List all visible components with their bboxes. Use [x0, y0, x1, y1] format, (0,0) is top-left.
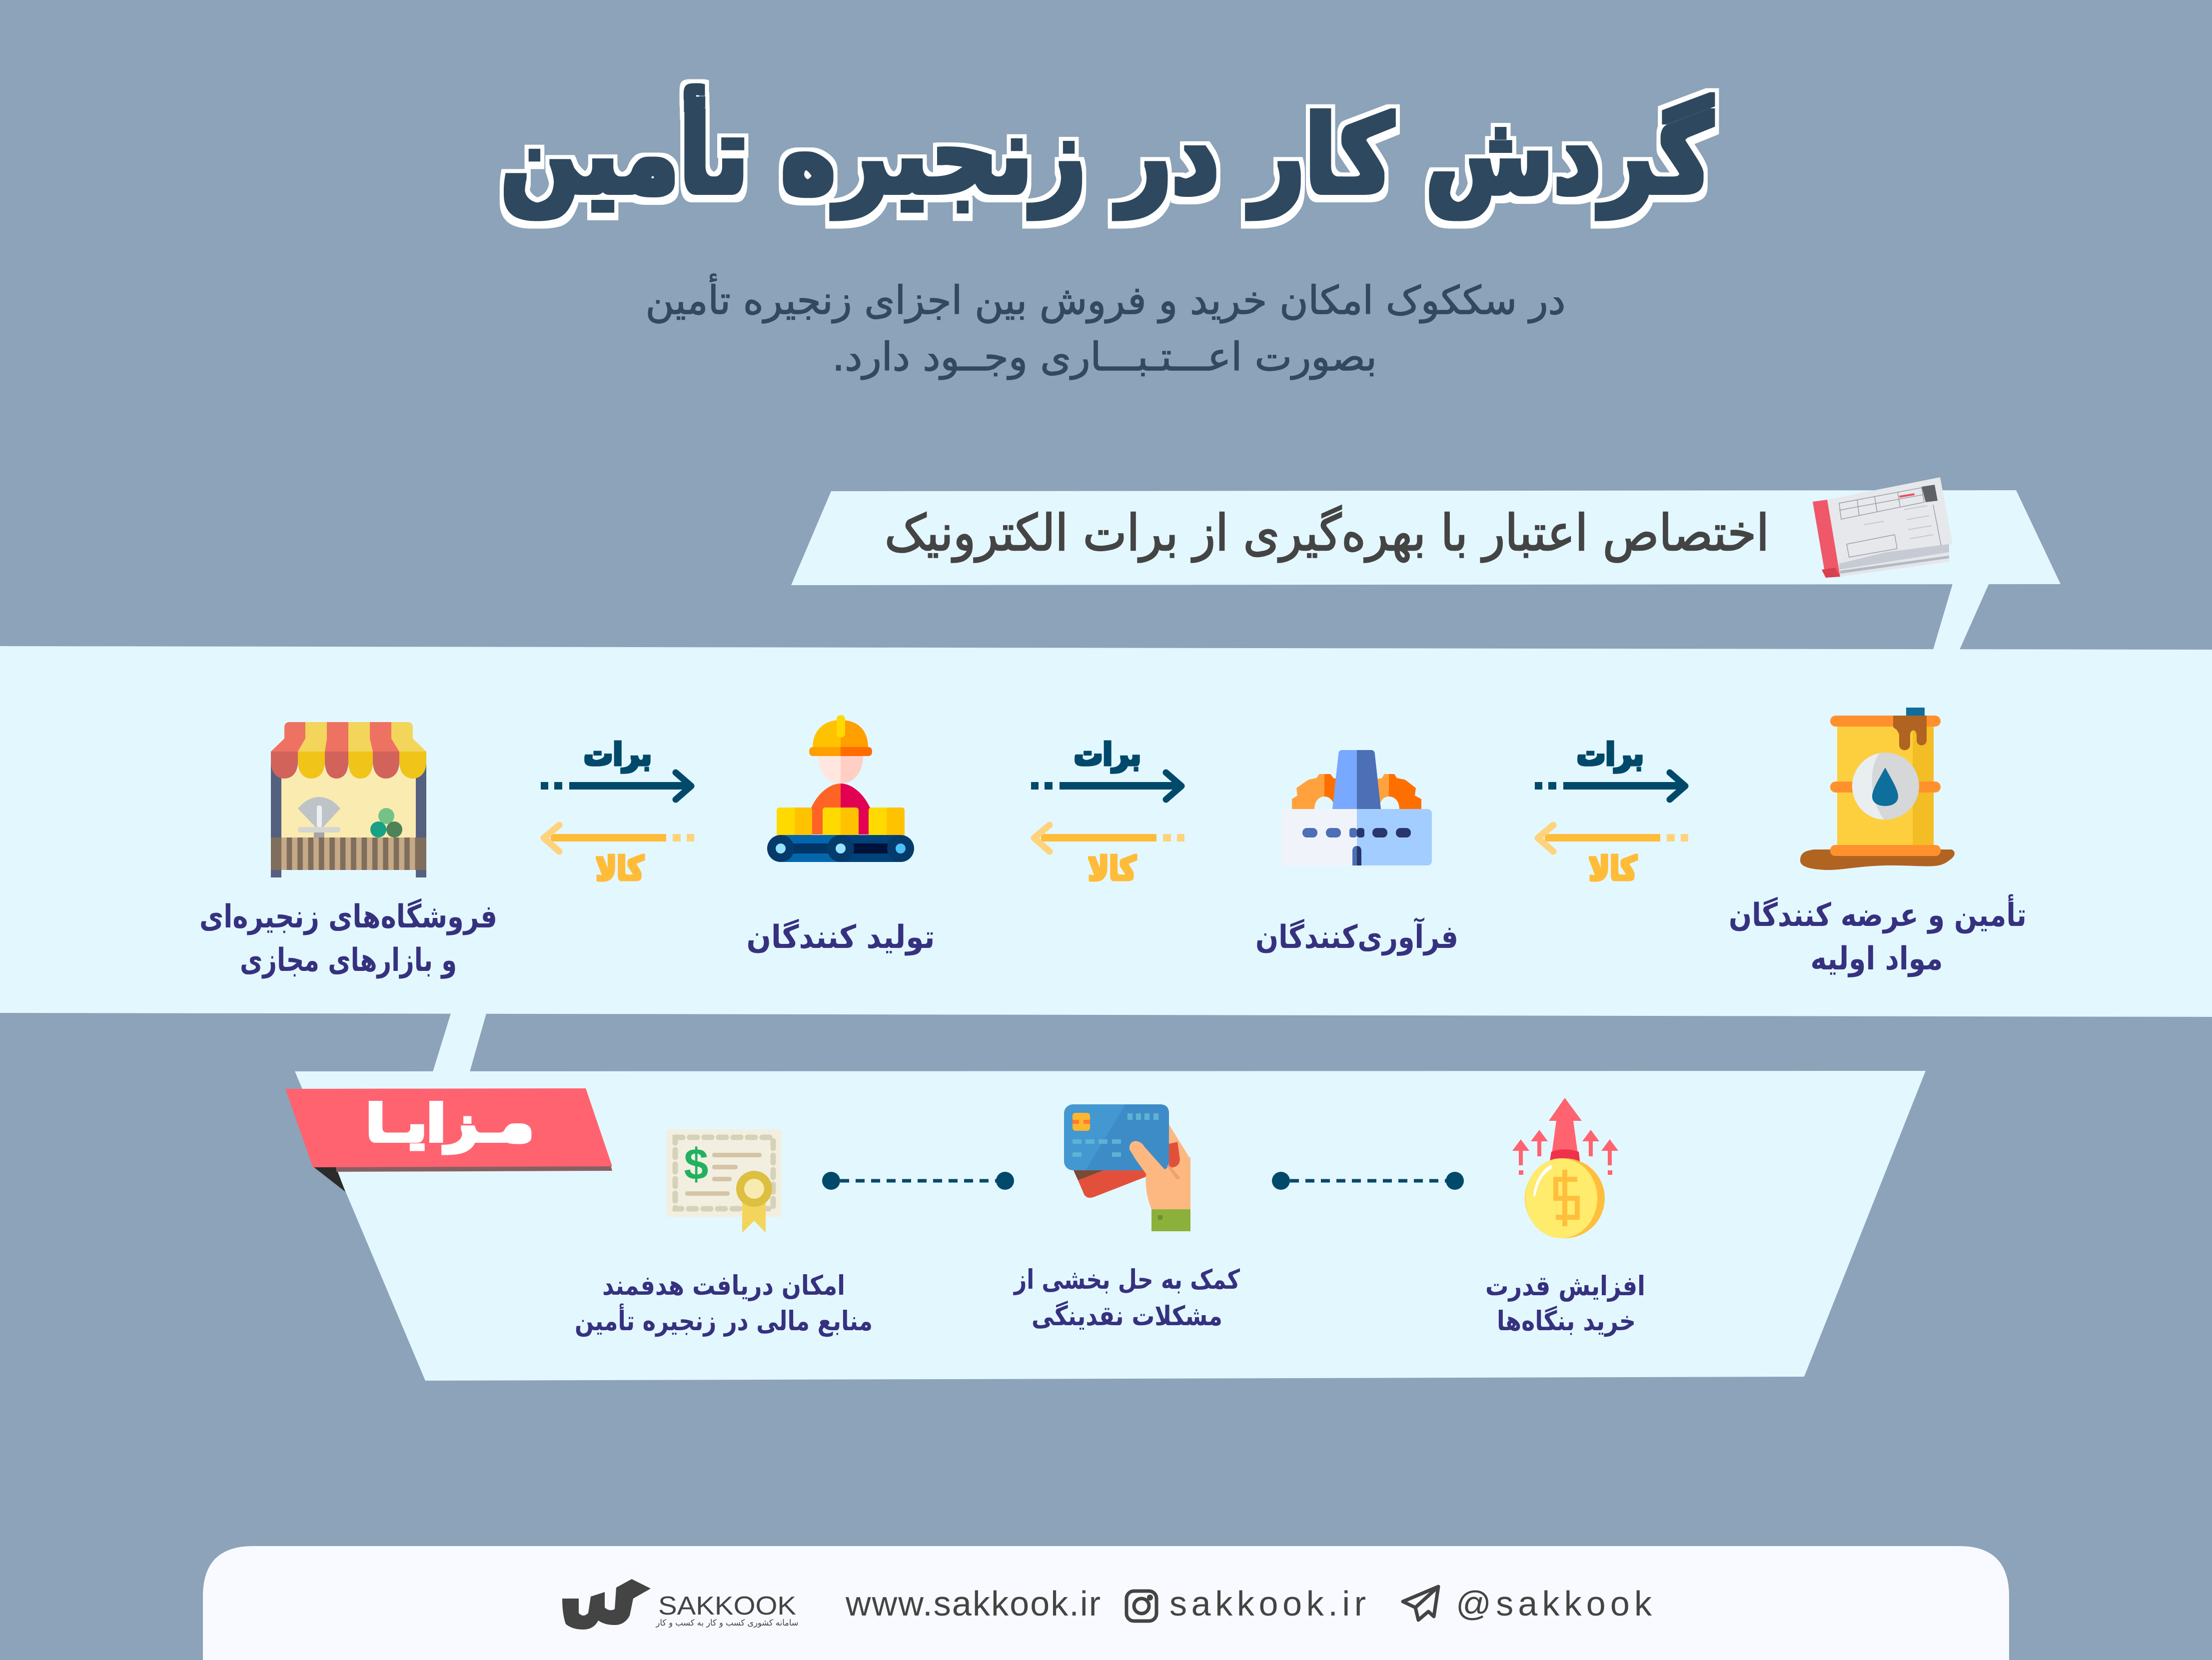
label: liquidity help: کمک به حل بخشی از	[1013, 1264, 1240, 1295]
arrow pair: processors and producers	[1031, 736, 1184, 888]
benefits ribbon	[285, 1088, 612, 1192]
label: liquidity help	[1013, 1264, 1240, 1332]
icon: certificate: $	[684, 1139, 708, 1189]
banner heading: اختصاص اعتبار با بهره‌گیری از برات الکترونیک	[885, 504, 1769, 563]
panel: electronic bill banner	[791, 490, 2061, 650]
label: raw material suppliers: مواد اولیه	[1810, 940, 1943, 977]
icon: factory	[1282, 750, 1432, 865]
subtitle text	[646, 274, 1565, 380]
arrow pair: producers and retailers: برات	[584, 736, 652, 773]
label: processors: فرآوری‌کنندگان	[1255, 917, 1458, 956]
arrow pair: processors and producers: برات	[1074, 736, 1141, 773]
website: www.sakkook.ir	[845, 1584, 1101, 1623]
arrow pair: raw materials and processors	[1535, 736, 1688, 888]
icon: instagram	[1126, 1591, 1156, 1621]
label: purchasing power: خرید بنگاه‌ها	[1497, 1305, 1636, 1337]
dotted connector	[822, 1172, 1014, 1190]
arrow pair: processors and producers: کالا	[1088, 849, 1136, 888]
icon: credit cards in hand	[1064, 1104, 1190, 1231]
title: گردش کار در زنجیره تأمین	[501, 85, 1713, 219]
subtitle text: بصورت اعـــتـبـــاری وجــود دارد.	[832, 335, 1377, 380]
arrow pair: producers and retailers: کالا	[596, 849, 644, 888]
icon: oil barrel	[1800, 708, 1955, 870]
icon: telegram	[1403, 1587, 1438, 1620]
label: target funding: منابع مالی در زنجیره تأمین	[575, 1303, 873, 1337]
arrow pair: producers and retailers	[541, 736, 694, 888]
label: producers: تولید کنندگان	[747, 918, 935, 956]
label: purchasing power: افزایش قدرت	[1485, 1270, 1645, 1302]
ribbon heading: مـزایـا	[366, 1094, 534, 1153]
logo: SAKKOOK	[658, 1592, 796, 1621]
panel: benefits	[295, 1012, 1926, 1381]
arrow pair: raw materials and processors: برات	[1577, 736, 1644, 773]
logo	[562, 1579, 799, 1630]
subtitle text: در سککوک امکان خرید و فروش بین اجزای زنجیره تأمین	[646, 274, 1565, 324]
label: raw material suppliers: تأمین و عرضه کنندگان	[1729, 894, 2027, 934]
label: retailers: و بازارهای مجازی	[240, 942, 457, 979]
label: retailers: فروشگاه‌های زنجیره‌ای	[199, 898, 497, 935]
icon: worker on conveyor	[767, 715, 914, 862]
label: raw material suppliers	[1729, 894, 2027, 977]
label: target funding	[575, 1270, 873, 1337]
telegram handle: @sakkook	[1456, 1584, 1652, 1623]
dotted connector	[1272, 1172, 1464, 1190]
icon: bill booklet	[1813, 477, 1953, 578]
label: retailers	[199, 898, 497, 979]
label: target funding: امکان دریافت هدفمند	[602, 1270, 845, 1301]
icon: market stall	[271, 722, 426, 877]
icon: certificate	[666, 1129, 782, 1233]
label: purchasing power	[1485, 1270, 1645, 1337]
label: liquidity help: مشکلات نقدینگی	[1032, 1300, 1222, 1332]
instagram handle: sakkook.ir	[1169, 1584, 1366, 1623]
icon: coin with rising arrows	[1512, 1098, 1618, 1238]
footer panel	[203, 1546, 2009, 1660]
panel: supply chain band	[0, 646, 2212, 1017]
logo: سامانه کشوری کسب و کار به کسب و کار	[656, 1618, 799, 1628]
arrow pair: raw materials and processors: کالا	[1589, 849, 1637, 888]
